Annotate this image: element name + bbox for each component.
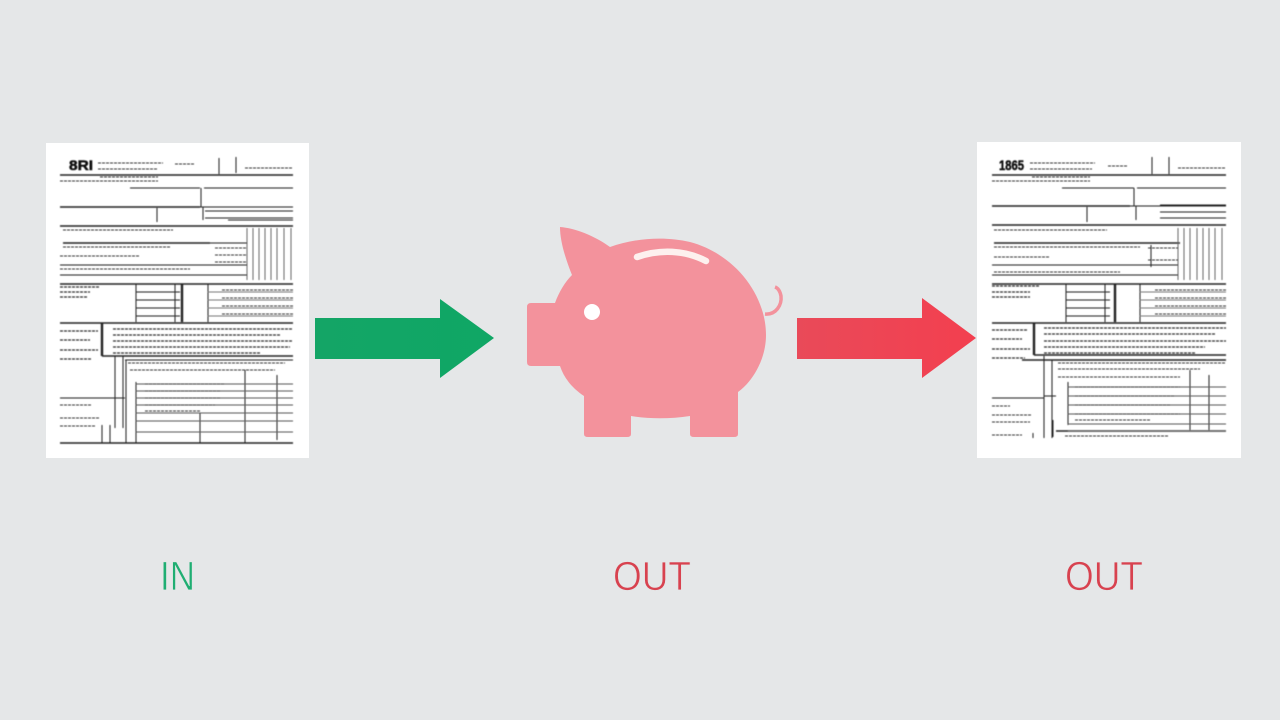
pig tail [765,287,781,314]
panel: right tax form [977,142,1241,458]
pig eye [584,304,600,320]
arrow: green in arrow [315,299,494,378]
label: OUT right: OUT [1065,553,1143,599]
label: IN: IN [160,553,195,599]
label: OUT center: OUT [613,553,691,599]
icon: piggy bank [527,227,781,437]
pig highlight [637,252,706,261]
panel: left tax form [46,143,309,458]
form number: 8RI [69,157,93,173]
pig body [527,227,766,437]
arrow: red out arrow [797,298,976,378]
form number: 1865 [999,157,1024,173]
